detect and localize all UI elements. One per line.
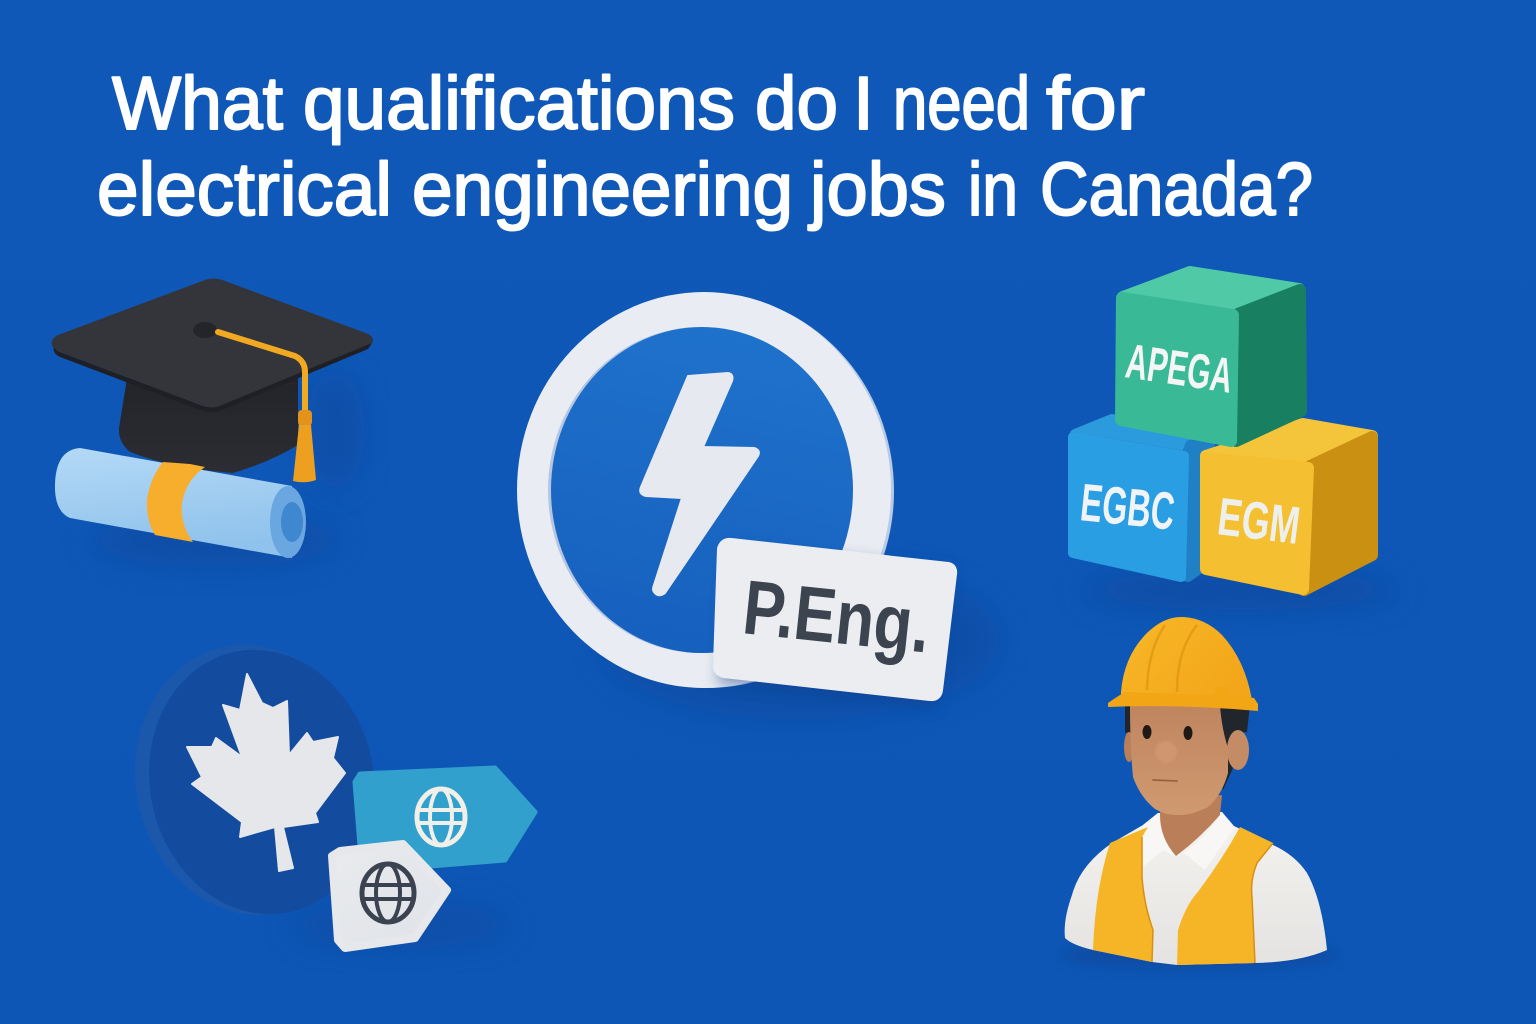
mouth — [1153, 780, 1177, 781]
ring — [517, 292, 894, 688]
safety vest — [1093, 827, 1273, 965]
nose — [1155, 741, 1177, 763]
title: engineering — [412, 147, 793, 231]
shoulders and shirt — [1065, 812, 1327, 965]
title: jobs — [808, 147, 946, 231]
lightning bolt — [640, 373, 759, 595]
block: EGBC: EGBC — [1078, 473, 1177, 542]
title: in — [968, 147, 1018, 231]
eyes — [1142, 725, 1192, 740]
block: APEGA: APEGA — [1122, 334, 1236, 404]
icon: graduation cap and diploma — [52, 280, 372, 566]
title: for — [1046, 61, 1145, 145]
white tag with globe — [332, 844, 447, 948]
title: qualifications — [303, 61, 735, 145]
tassel — [193, 322, 316, 482]
block: APEGA — [1121, 272, 1301, 441]
diploma roll — [55, 448, 306, 558]
icon: Canadian maple leaf with language tags — [110, 623, 535, 948]
title: Canada? — [1040, 147, 1313, 231]
P.Eng tag: P.Eng. — [739, 564, 934, 669]
title: electrical — [97, 147, 392, 231]
hair back — [1125, 705, 1250, 790]
neck — [1160, 795, 1222, 856]
hard hat — [1108, 617, 1258, 711]
icon: licensing body blocks — [1073, 272, 1400, 610]
P.Eng tag — [718, 544, 951, 707]
title: What — [112, 61, 283, 145]
mortarboard — [52, 280, 372, 406]
block: EGM — [1206, 424, 1372, 590]
collar — [1143, 812, 1234, 870]
title: need — [893, 61, 1030, 145]
title — [97, 61, 1313, 231]
maple leaf — [187, 674, 345, 871]
dark blue disc — [110, 623, 399, 937]
icon: engineer with hard hat — [1060, 617, 1340, 969]
block: EGM: EGM — [1215, 487, 1303, 556]
title: I — [853, 61, 874, 145]
block: EGBC — [1073, 419, 1210, 577]
head — [1124, 706, 1228, 815]
blue tag with globe — [355, 768, 535, 866]
cap base — [119, 378, 298, 473]
icon: P.Eng lightning badge — [517, 292, 1000, 720]
ear — [1227, 730, 1249, 770]
title: do — [755, 61, 838, 145]
